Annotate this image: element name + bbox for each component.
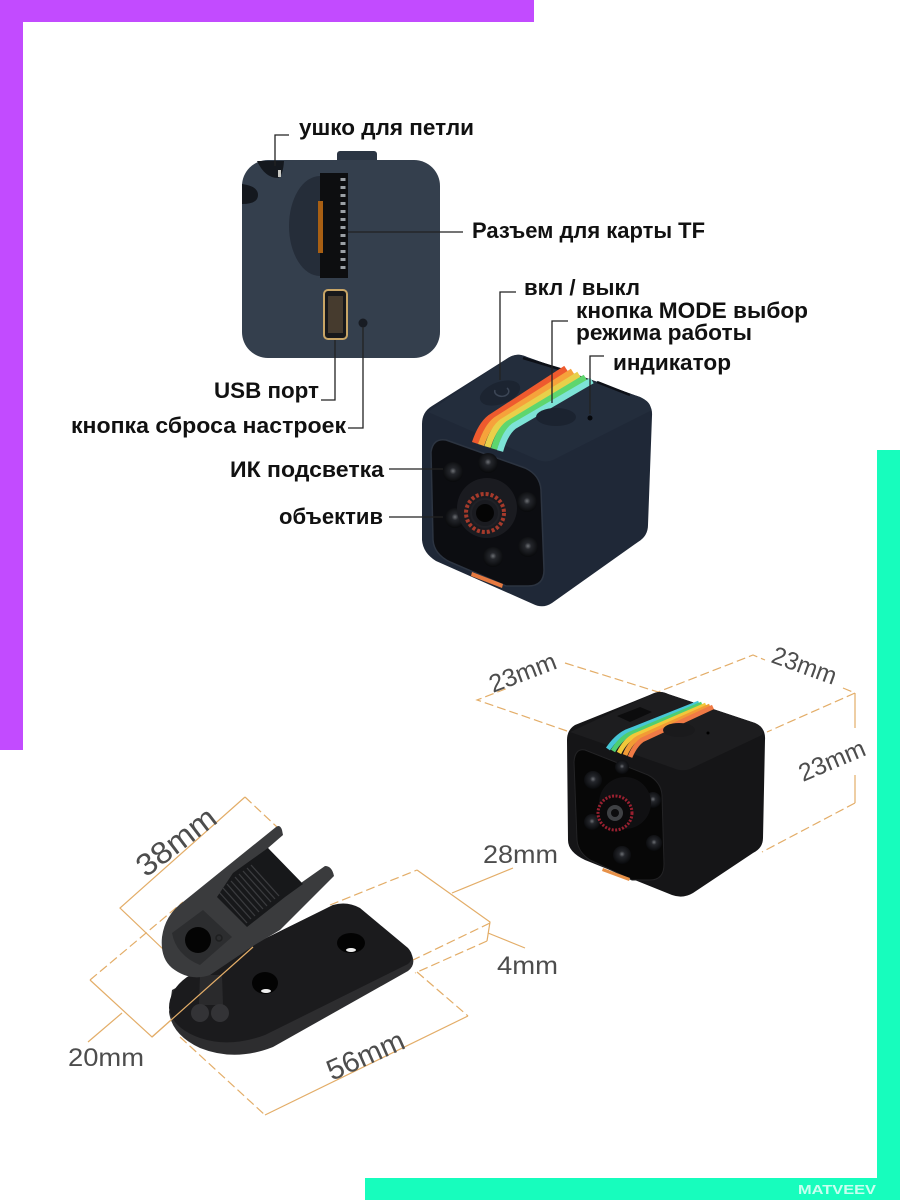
slot pins [340, 178, 346, 274]
label: reset: кнопка сброса настроек [71, 413, 347, 438]
camera front view [422, 355, 652, 606]
label: power: вкл / выкл [524, 275, 640, 300]
top button [617, 707, 652, 722]
clip hole inlay [172, 910, 232, 965]
top face [428, 355, 651, 462]
dimension label: 28mm: 28mm [483, 841, 558, 869]
label: mode [576, 298, 808, 345]
leader: TF slot [348, 231, 463, 233]
mode button [663, 723, 695, 737]
leader: IR [389, 468, 443, 470]
lens text ring [466, 494, 504, 532]
cube body [567, 692, 765, 897]
label: USB: USB порт [214, 378, 319, 403]
lens text ring [598, 796, 632, 830]
dimension label: 56mm: 56mm [322, 1025, 410, 1087]
dimension label: 23mm right: 23mm [768, 641, 840, 691]
top face [570, 692, 763, 770]
leader: USB [321, 340, 335, 400]
dimension label: 23mm height: 23mm [794, 734, 870, 788]
clip dimension lines [88, 797, 525, 1115]
label: loop: ушко для петли [299, 115, 474, 140]
lens housing [599, 777, 651, 829]
label: lens: объектив [279, 504, 383, 529]
front panel [574, 750, 664, 880]
leader: reset [348, 327, 363, 428]
plate side [169, 905, 413, 1055]
rainbow strip [475, 368, 592, 451]
dimension label: 23mm left: 23mm [485, 647, 561, 699]
loop eyelet [242, 161, 284, 204]
leader: indicator [590, 356, 604, 414]
clip body [162, 826, 334, 977]
TF card slot [320, 173, 348, 278]
stud [191, 975, 229, 1022]
clip hole [185, 927, 211, 953]
label: mode: кнопка MODE выбор [576, 298, 808, 323]
card contact strip [318, 201, 323, 253]
clip inner channel [217, 848, 303, 927]
small black camera [567, 692, 765, 897]
mode button [536, 408, 576, 426]
LEDs [584, 760, 662, 864]
lens [607, 805, 623, 821]
clip mount [162, 826, 413, 1055]
leader: mode [552, 321, 568, 403]
purple corner frame [0, 0, 534, 750]
lens housing [457, 478, 517, 538]
dimension label: 20mm: 20mm [68, 1044, 144, 1072]
camera back view [242, 151, 440, 358]
plate holes [252, 933, 365, 994]
cube body [422, 355, 652, 606]
dimension label: 38mm: 38mm [129, 800, 223, 884]
eyelet highlight [278, 170, 281, 177]
indicator hole [588, 416, 592, 420]
LEDs [443, 453, 538, 567]
plate top [169, 904, 412, 1042]
bottom strip [602, 868, 630, 881]
lens [476, 504, 494, 522]
leader: power [500, 292, 516, 380]
clip ridges [219, 865, 279, 923]
back body [242, 160, 440, 358]
card recess [289, 176, 320, 276]
reset hole [358, 318, 368, 328]
clip logo [216, 935, 222, 941]
green corner frame [365, 450, 900, 1200]
label: indicator: индикатор [613, 350, 731, 375]
leader: lens [389, 516, 443, 518]
cube dimension lines [477, 655, 855, 852]
brand label: MATVEEV [798, 1182, 876, 1197]
top button [337, 151, 377, 165]
power button [477, 375, 523, 411]
indicator [706, 732, 710, 734]
dimension label: 4mm: 4mm [497, 952, 558, 980]
grooves [523, 358, 630, 395]
label: TF slot: Разъем для карты TF [472, 218, 705, 243]
label: IR: ИК подсветка [230, 457, 385, 482]
overlay dashed line [152, 947, 253, 1037]
leader: loop [275, 135, 289, 166]
rainbow strip [608, 703, 713, 757]
bottom strip [471, 572, 503, 588]
label: mode: режима работы [576, 320, 752, 345]
front panel [431, 440, 544, 586]
USB port [324, 290, 347, 339]
